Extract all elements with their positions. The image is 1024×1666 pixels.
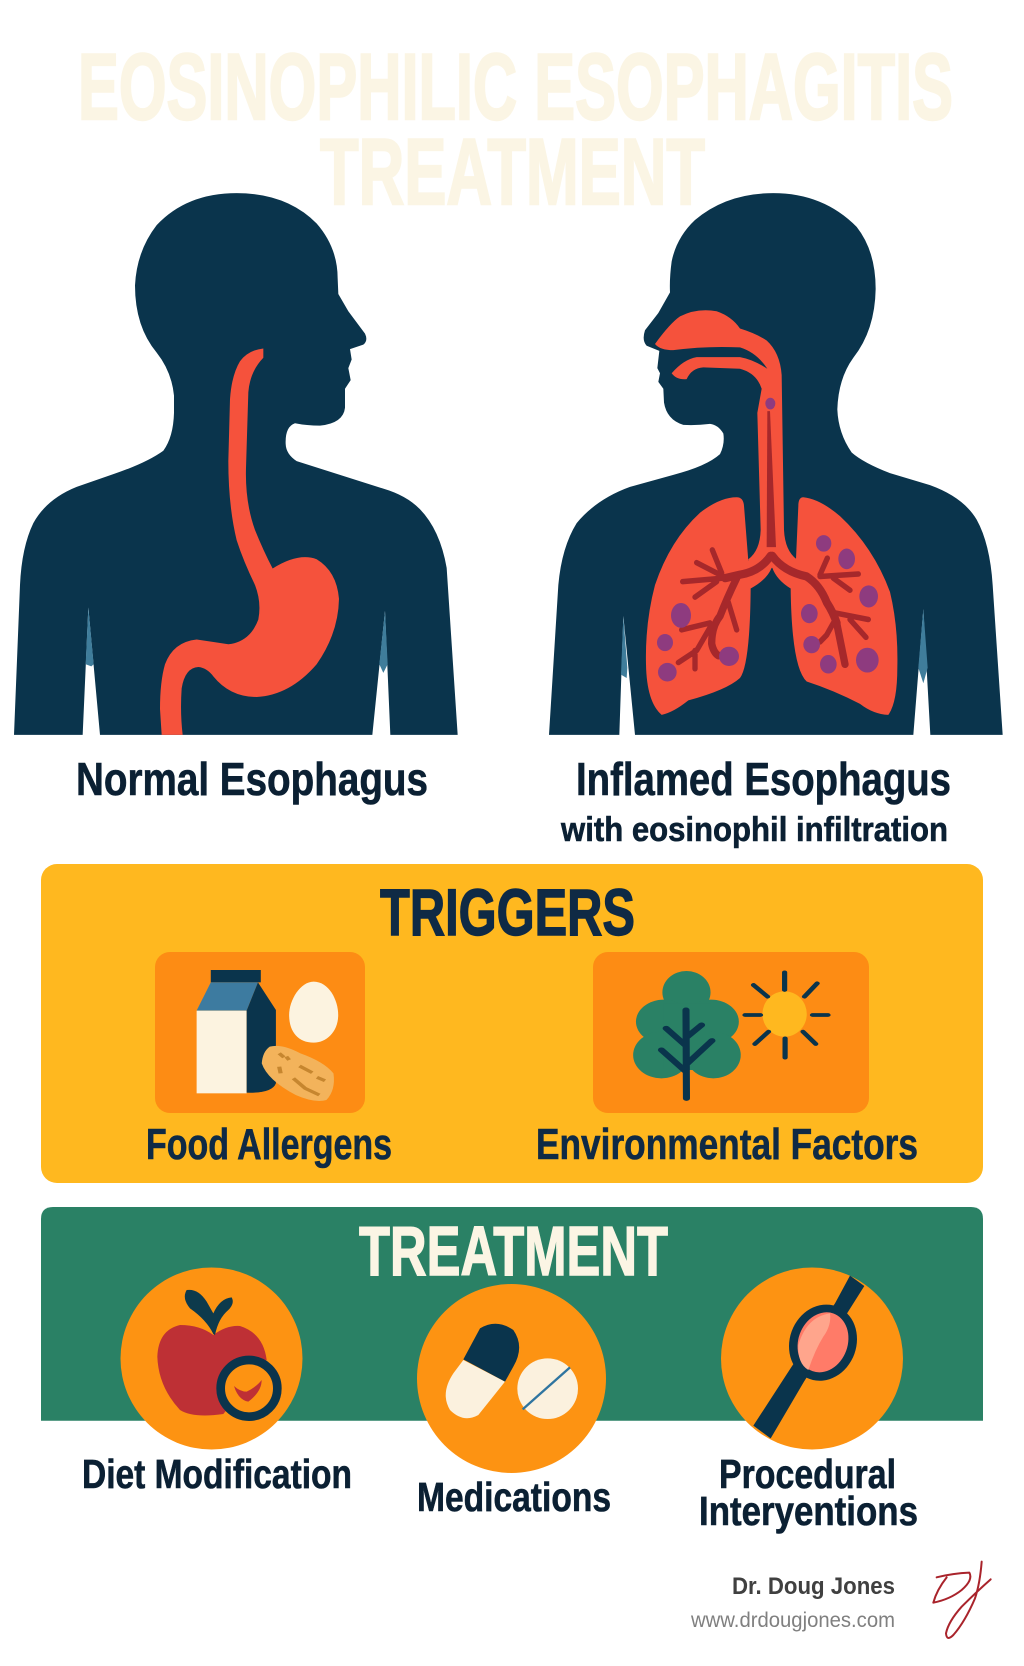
nasal cavity and trachea xyxy=(655,310,797,568)
title: TREATMENT xyxy=(320,119,705,224)
title xyxy=(78,34,953,224)
right lung xyxy=(772,497,897,715)
label: procedural interventions: Procedural xyxy=(719,1451,896,1497)
label: inflamed esophagus: Inflamed Esophagus xyxy=(576,753,951,805)
panel: treatment xyxy=(41,1207,983,1534)
signature xyxy=(933,1562,991,1638)
arm gap highlights xyxy=(86,607,388,673)
icon: diet modification xyxy=(120,1268,302,1450)
author credit: www.drdougjones.com xyxy=(690,1609,895,1632)
figure: inflamed esophagus xyxy=(549,193,1003,735)
label: environmental factors: Environmental Factors xyxy=(536,1120,918,1169)
label: medications: Medications xyxy=(417,1474,611,1520)
heading: treatment: TREATMENT xyxy=(359,1212,668,1290)
author credit xyxy=(690,1573,895,1632)
esophagus and stomach xyxy=(160,348,339,735)
silhouette: inflamed body xyxy=(549,193,1003,735)
label: inflamed esophagus: with eosinophil infiltration xyxy=(560,811,948,849)
label: normal esophagus: Normal Esophagus xyxy=(76,753,428,805)
icon tile: environmental factors xyxy=(593,952,869,1113)
left lung xyxy=(646,497,773,715)
arm gap highlights xyxy=(621,609,928,683)
author credit: Dr. Doug Jones xyxy=(732,1573,895,1600)
icon: medications xyxy=(417,1284,606,1473)
icon tile: food allergens xyxy=(155,952,365,1113)
label: diet modification: Diet Modification xyxy=(82,1451,352,1497)
icon: procedural interventions xyxy=(721,1268,903,1450)
silhouette: normal body xyxy=(14,193,458,735)
figure: normal esophagus xyxy=(14,193,458,735)
heading: triggers: TRIGGERS xyxy=(380,875,635,949)
label: inflamed esophagus xyxy=(560,753,951,849)
label: food allergens: Food Allergens xyxy=(146,1120,392,1169)
eosinophil spots xyxy=(657,398,879,681)
bronchi xyxy=(678,411,868,669)
label: procedural interventions: Interyentions xyxy=(699,1488,918,1534)
label: procedural interventions xyxy=(699,1451,918,1534)
panel: triggers xyxy=(41,864,983,1183)
